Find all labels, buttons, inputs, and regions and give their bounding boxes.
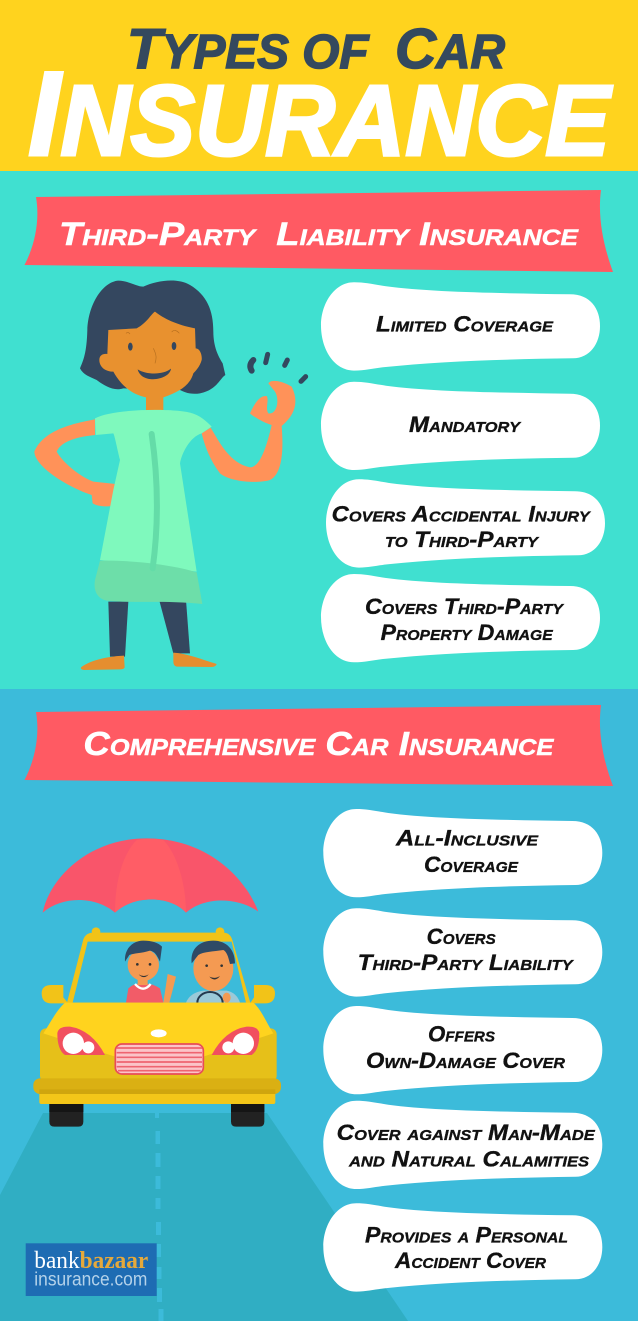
feature: mandatory: Mandatory [409,412,522,437]
feature: offers own-damage cover: Own-Damage Cover [366,1048,565,1073]
feature: covers property damage: Covers Third-Party [365,594,565,619]
feature: personal accident cover: Accident Cover [394,1248,546,1273]
title: TYPES OF CAR [127,17,505,81]
feature: mandatory [321,382,600,470]
feature: limited coverage: Limited Coverage [376,312,554,337]
feature: offers own-damage cover: Offers [428,1022,495,1047]
panel: comprehensive car insurance [0,705,613,1321]
road with dashed centre line [0,1108,408,1321]
feature: covers property damage: Property Damage [381,620,554,645]
feature: covers accidental injury: to Third-Party [385,527,540,552]
feature: covers third-party liability [323,908,602,997]
logo: bankbazaar insurance.com: insurance.com [34,1270,147,1290]
feature: covers accidental injury [326,479,605,568]
feature: limited coverage [321,282,600,371]
list: comprehensive features [323,809,602,1292]
banner: comprehensive heading [24,705,613,786]
icon: umbrella [43,838,258,913]
banner: comprehensive heading: Comprehensive Car Insurance [83,725,554,762]
feature: covers third-party liability: Covers [427,924,496,949]
feature: all-inclusive coverage [323,809,602,897]
illustration: woman making OK gesture [34,281,306,670]
feature: offers own-damage cover [323,1006,602,1094]
feature: man-made and natural calamities [323,1101,602,1189]
icon: car with two passengers [33,927,281,1127]
feature: personal accident cover: Provides a Personal [365,1223,568,1248]
logo: bankbazaar insurance.com: bankbazaar [34,1248,149,1274]
feature: all-inclusive coverage: All-Inclusive [395,826,539,851]
feature: covers third-party liability: Third-Party Liability [358,950,575,975]
feature: covers accidental injury: Covers Accidental Injury [332,502,592,527]
banner: third-party heading: Third-Party Liability Insurance [59,216,580,252]
title: INSURANCE [28,47,613,181]
illustration: umbrella over car [33,838,281,1127]
feature: all-inclusive coverage: Coverage [424,852,519,877]
logo: bankbazaar insurance.com [26,1243,157,1296]
feature: man-made and natural calamities: Cover against Man-Made [337,1120,596,1145]
list: third-party features [321,282,605,662]
feature: man-made and natural calamities: and Natural Calamities [348,1147,589,1172]
feature: personal accident cover [323,1203,602,1292]
feature: covers property damage [321,574,600,662]
panel: third-party liability insurance [24,190,613,670]
banner: third-party heading [24,190,613,272]
